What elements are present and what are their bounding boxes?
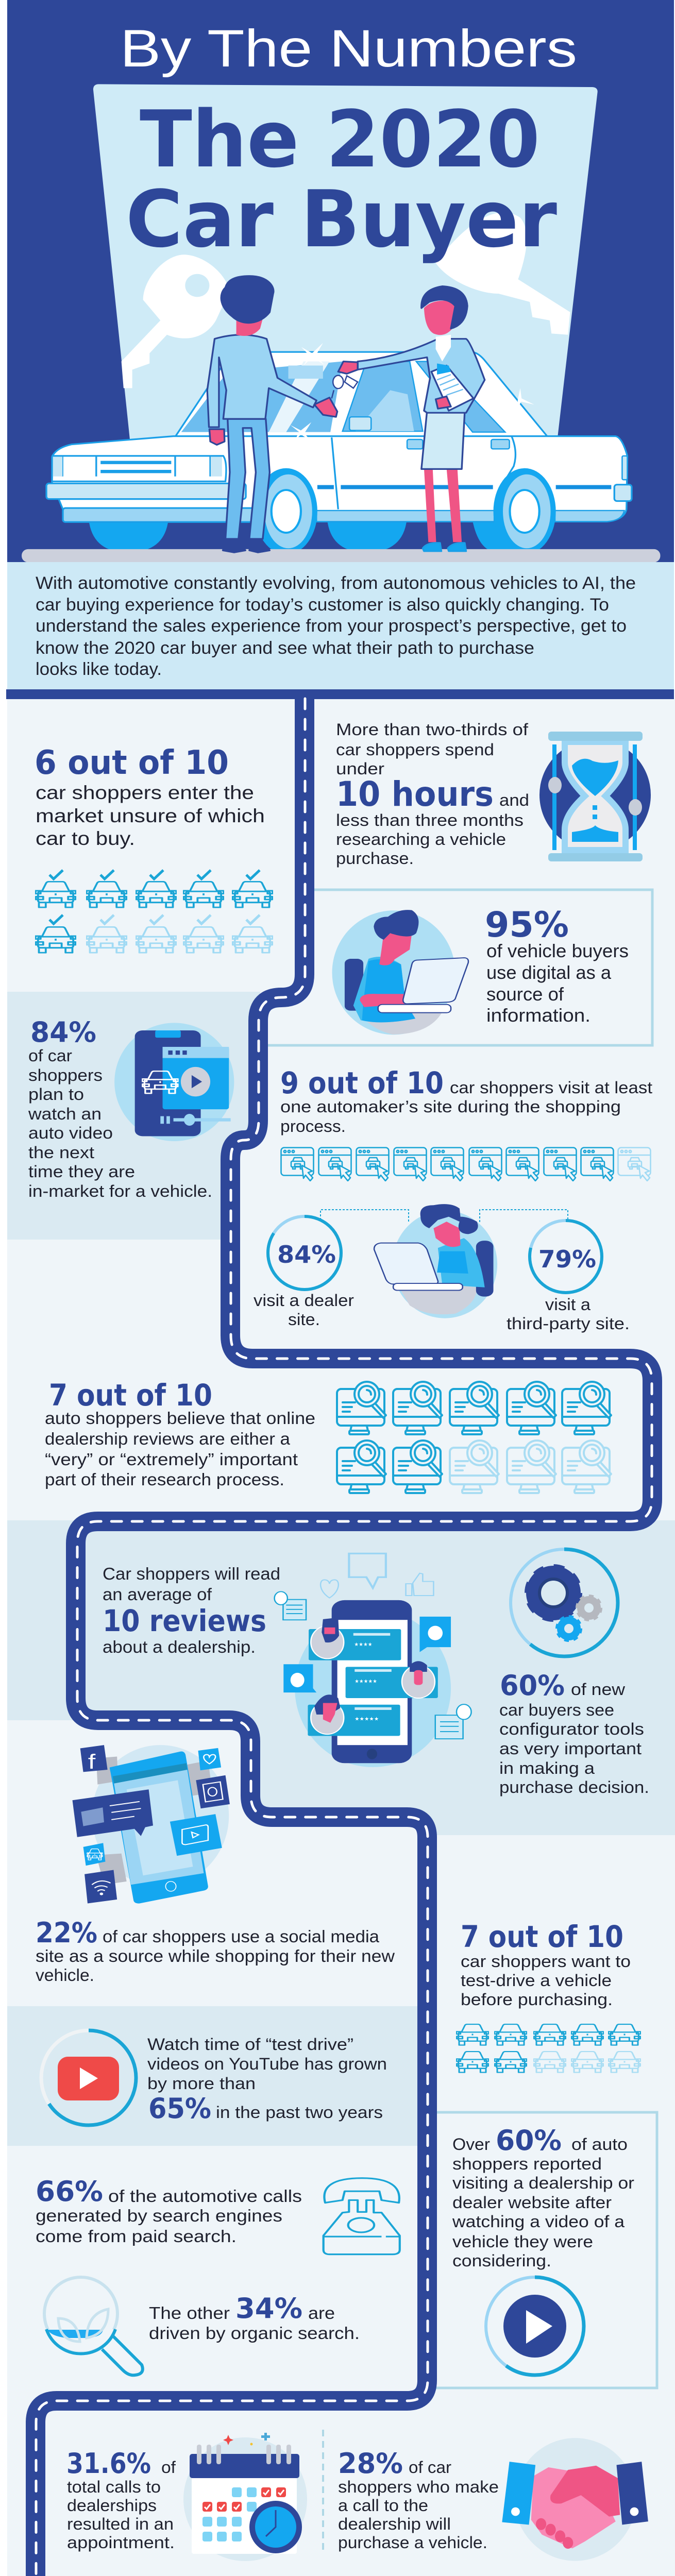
stat: 66% paid search calls: of the automotive calls <box>108 2187 302 2206</box>
chart: 84% visit a dealer site <box>254 1216 354 1329</box>
stat: 84% watch auto video: shoppers <box>28 1066 103 1084</box>
icon: car keys <box>332 376 358 398</box>
stat: 34% organic search: 34% <box>235 2292 302 2325</box>
review cards: ★★★★ <box>354 1641 373 1648</box>
stat: 7 out of 10 reviews: auto shoppers believe that online <box>45 1409 315 1428</box>
stat: 28% will purchase: shoppers who make <box>338 2478 499 2496</box>
stat: 7 out of 10 test-drive <box>457 1919 640 2072</box>
icon: handshake <box>502 2438 648 2561</box>
stat: test drive videos 65% <box>41 2030 387 2125</box>
stat: 10 hours <box>336 720 651 868</box>
chart: 79% visit a third-party site: third-party site. <box>507 1314 630 1333</box>
icon: right key <box>436 212 570 335</box>
icon grid: ten cars <box>457 2024 640 2072</box>
icon row: ten cars with checkmarks <box>36 870 273 953</box>
stat: over 60% visited dealership after video <box>452 2124 634 2375</box>
stat: 28% will purchase: of car <box>409 2458 451 2477</box>
stat: 66% paid search calls: come from paid search. <box>36 2227 237 2246</box>
chart: 84% visit a dealer site: visit a dealer <box>254 1291 354 1310</box>
side bubbles and icons <box>275 1553 471 1739</box>
stat: 7 out of 10 reviews: dealership reviews are either a <box>45 1429 291 1448</box>
front wheels <box>255 468 556 554</box>
chart: 79% visit a third-party site <box>507 1221 630 1333</box>
icon: rotary telephone <box>324 2178 400 2255</box>
stat: 95% use digital: 95% <box>485 905 569 945</box>
stat: 34% organic search: driven by organic search. <box>149 2324 360 2343</box>
stat: over 60% visited dealership after video: considering. <box>452 2251 551 2270</box>
stat: 60% configurator tools: as very important <box>499 1739 642 1758</box>
stat: 10 hours: less than three months <box>336 811 524 829</box>
chart: 79% visit a third-party site: visit a <box>545 1295 590 1314</box>
stat: 84% watch auto video: of car <box>28 1046 72 1065</box>
stat: over 60% visited dealership after video: visiting a dealership or <box>452 2174 634 2192</box>
social tiles: f <box>88 1750 95 1773</box>
icon row: ten browser windows <box>281 1148 650 1181</box>
stat: 6 out of 10: market unsure of which <box>36 805 265 826</box>
stat: 10 reviews <box>103 1564 280 1656</box>
stat: 84% watch auto video <box>28 1016 234 1200</box>
icon: left key <box>122 255 229 388</box>
stat: 22% social media: of car shoppers use a social media <box>103 1927 380 1946</box>
illustration: phone with social media icons <box>73 1745 230 1904</box>
stat: 95% use digital: source of <box>486 984 564 1005</box>
stat: 34% organic search: are <box>308 2303 335 2323</box>
stat: 7 out of 10 reviews: 7 out of 10 <box>49 1378 212 1413</box>
illustration: phone with video <box>114 1023 234 1141</box>
stat: 10 reviews: Car shoppers will read <box>103 1564 280 1583</box>
stat: 60% configurator tools: car buyers see <box>499 1701 614 1719</box>
stat: 31.6% calls resulted in appointment: total calls to <box>67 2478 161 2496</box>
stat: 7 out of 10 reviews <box>45 1378 611 1493</box>
stat: 10 reviews: an average of <box>103 1585 212 1604</box>
stat: 10 hours: purchase. <box>336 849 414 868</box>
stat: 66% paid search calls: 66% <box>36 2175 103 2208</box>
illustration: woman at laptop <box>320 1204 568 1318</box>
stat: 66% paid search calls: generated by search engines <box>36 2206 282 2225</box>
stat: 31.6% calls resulted in appointment: appointment. <box>67 2533 175 2552</box>
stat: test drive videos 65%: Watch time of “test drive” <box>147 2035 353 2054</box>
stat: 31.6% calls resulted in appointment: of <box>161 2458 176 2477</box>
stat: 66% paid search calls <box>36 2175 400 2255</box>
stat: 6 out of 10: 6 out of 10 <box>35 744 229 782</box>
stat: 9 out of 10 visit automaker site <box>280 1065 652 1181</box>
stat: 22% social media <box>36 1917 395 1985</box>
stat: 7 out of 10 reviews: “very” or “extremely” important <box>45 1450 298 1469</box>
review cards <box>308 1618 438 1736</box>
car roof and windows <box>176 352 547 436</box>
intro text block: car buying experience for today’s customer is also quickly changing. To <box>36 595 609 615</box>
stat: test drive videos 65%: by more than <box>147 2074 256 2093</box>
chart: gears in ring <box>511 1549 618 1656</box>
stat: 9 out of 10 visit automaker site: process. <box>280 1117 346 1136</box>
social tiles <box>73 1745 230 1904</box>
stat: 34% organic search: The other <box>149 2303 230 2323</box>
chart: 84% visit a dealer site: site. <box>288 1310 320 1329</box>
stat: 84% watch auto video: the next <box>28 1143 94 1162</box>
stat: 28% will purchase: a call to the <box>338 2496 428 2515</box>
stat: 84% watch auto video: 84% <box>30 1016 96 1048</box>
stat: 28% will purchase: purchase a vehicle. <box>338 2533 487 2552</box>
stat: 84% watch auto video: watch an <box>28 1105 102 1123</box>
header panel <box>7 0 674 562</box>
stat: 31.6% calls resulted in appointment: 31.6% <box>66 2447 151 2480</box>
stat: 60% configurator tools: of new <box>571 1680 626 1699</box>
stat: 84% watch auto video: in-market for a vehicle. <box>28 1182 212 1200</box>
car body <box>52 436 628 521</box>
intro text block: know the 2020 car buyer and see what their path to purchase <box>36 638 534 658</box>
stat: test drive videos 65%: videos on YouTube has grown <box>147 2055 387 2073</box>
stat: 22% social media: 22% <box>36 1917 97 1949</box>
intro text block <box>7 562 674 689</box>
icon: magnifier with leaves <box>44 2277 143 2375</box>
stat: 6 out of 10: car to buy. <box>36 828 135 849</box>
rear wheels <box>89 521 168 552</box>
heading: The 2020 Car Buyer <box>126 94 557 265</box>
stat: 28% will purchase <box>338 2438 648 2561</box>
stat: over 60% visited dealership after video: Over <box>452 2135 490 2154</box>
stat: 7 out of 10 reviews: part of their research process. <box>45 1470 284 1489</box>
illustration: person at laptop <box>332 910 468 1035</box>
stat: 34% organic search <box>44 2277 360 2375</box>
review cards: ★★★★★ <box>355 1678 377 1684</box>
stat: 7 out of 10 test-drive: 7 out of 10 <box>461 1919 623 1954</box>
stat: 84% watch auto video: plan to <box>28 1085 84 1104</box>
stat: 31.6% calls resulted in appointment: resulted in an <box>67 2515 174 2533</box>
stat: 95% use digital <box>332 905 629 1035</box>
stat: 60% configurator tools: configurator tools <box>499 1720 644 1738</box>
stat: 9 out of 10 visit automaker site: one automaker’s site during the shopping <box>280 1097 621 1116</box>
stat: 28% will purchase: dealership will <box>338 2515 451 2533</box>
stat: 9 out of 10 visit automaker site: 9 out of 10 <box>280 1065 444 1100</box>
heading: By The Numbers: By The Numbers <box>120 19 577 78</box>
illustration: car, salesperson and buyer <box>22 276 660 562</box>
stat: 60% configurator tools: 60% <box>500 1669 565 1702</box>
billboard illustration background <box>93 84 598 442</box>
stat: 7 out of 10 test-drive: car shoppers want to <box>461 1952 631 1971</box>
stat: 60% configurator tools: purchase decision. <box>499 1778 649 1797</box>
road path <box>36 699 675 2576</box>
review cards: ★★★★★ <box>355 1716 379 1722</box>
intro text block: With automotive constantly evolving, from autonomous vehicles to AI, the <box>36 573 636 593</box>
stat: 60% configurator tools <box>499 1549 649 1797</box>
stat: over 60% visited dealership after video: shoppers reported <box>452 2155 602 2173</box>
stat: 10 hours: car shoppers spend <box>336 740 494 759</box>
icon grid: monitors with magnifiers <box>337 1382 611 1493</box>
stat: 10 reviews: about a dealership. <box>103 1637 256 1656</box>
stat: 6 out of 10 <box>35 744 273 953</box>
stat: 10 hours: researching a vehicle <box>336 830 506 849</box>
chart: play button ring <box>486 2277 584 2375</box>
figure: buyer <box>207 276 338 552</box>
stat: 28% will purchase: 28% <box>338 2447 403 2480</box>
stat: over 60% visited dealership after video: of auto <box>571 2135 628 2154</box>
stat: over 60% visited dealership after video: vehicle they were <box>452 2232 593 2251</box>
icon: calendar and clock <box>183 2433 307 2561</box>
stat: over 60% visited dealership after video: 60% <box>496 2124 562 2157</box>
stat: 10 hours: More than two-thirds of <box>336 720 528 739</box>
illustration: phone with reviews <box>275 1553 471 1767</box>
stat: 7 out of 10 test-drive: before purchasing. <box>461 1990 613 2009</box>
stat: 31.6% calls resulted in appointment: dealerships <box>67 2496 157 2515</box>
heading: The 2020 Car Buyer: The 2020 <box>140 94 540 185</box>
stat: 95% use digital: information. <box>486 1005 590 1026</box>
stat: test drive videos 65%: in the past two years <box>216 2103 383 2122</box>
stat: 10 hours: under <box>336 759 384 778</box>
stat: 31.6% calls resulted in appointment <box>66 2433 307 2561</box>
stat: 84% watch auto video: time they are <box>28 1162 135 1181</box>
stat: 10 hours: and <box>499 791 529 809</box>
figure: salesperson <box>338 286 485 551</box>
stat: 60% configurator tools: in making a <box>499 1759 595 1777</box>
main stats background panel <box>6 689 675 2576</box>
chart: 79% visit a third-party site: 79% <box>538 1245 596 1273</box>
stat: 95% use digital: use digital as a <box>486 962 612 983</box>
stat: over 60% visited dealership after video: dealer website after <box>452 2193 612 2212</box>
stat: test drive videos 65%: 65% <box>148 2092 211 2125</box>
chart: 84% visit a dealer site: 84% <box>277 1241 336 1268</box>
intro text block: understand the sales experience from your prospect’s perspective, get to <box>36 616 627 636</box>
stat: 22% social media: site as a source while shopping for their new <box>36 1946 395 1965</box>
stat: 10 reviews: 10 reviews <box>103 1603 266 1638</box>
ground <box>22 549 660 562</box>
chart: YouTube play ring <box>41 2030 136 2125</box>
stat: 10 hours: 10 hours <box>336 774 494 814</box>
stat: 84% watch auto video: auto video <box>28 1124 113 1142</box>
icon: hourglass <box>539 732 651 861</box>
stat: 95% use digital: of vehicle buyers <box>486 940 629 961</box>
stat: 22% social media: vehicle. <box>36 1965 94 1985</box>
stat: 6 out of 10: car shoppers enter the <box>36 782 254 803</box>
sparkles <box>291 343 534 440</box>
intro text block: looks like today. <box>36 659 162 679</box>
heading: The 2020 Car Buyer: Car Buyer <box>126 174 557 265</box>
stat: 7 out of 10 test-drive: test-drive a vehicle <box>461 1971 612 1990</box>
stat: 9 out of 10 visit automaker site: car shoppers visit at least <box>450 1078 652 1097</box>
stat: over 60% visited dealership after video: watching a video of a <box>452 2212 625 2231</box>
